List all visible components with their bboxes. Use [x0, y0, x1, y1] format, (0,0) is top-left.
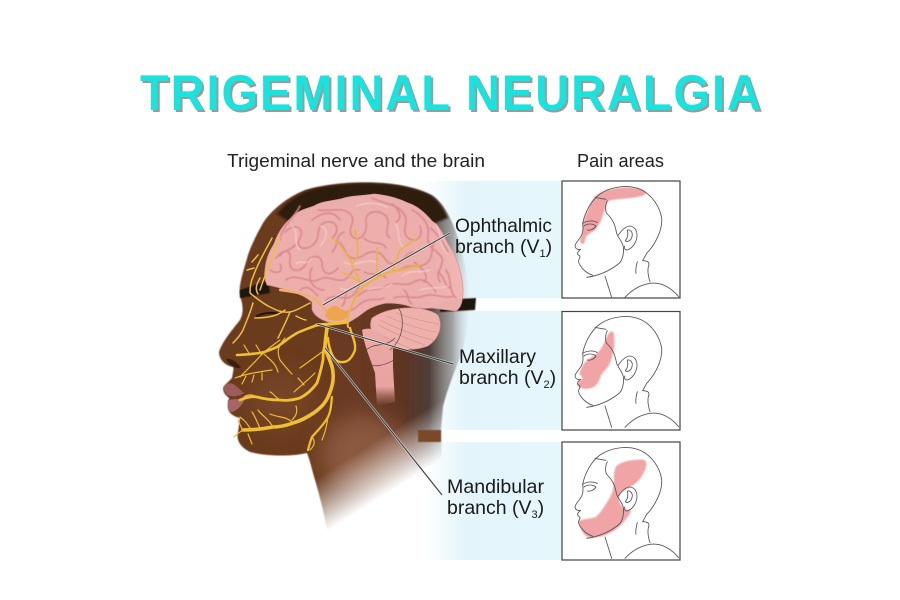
hair	[277, 183, 448, 225]
brain highlights	[292, 203, 448, 290]
cerebellum	[370, 308, 440, 349]
label: mandibular branch: Mandibular	[447, 476, 544, 498]
label: mandibular branch: )	[538, 497, 544, 519]
label: ophthalmic branch: )	[546, 236, 552, 258]
brainstem	[362, 329, 395, 406]
dark bands	[240, 281, 476, 442]
head line drawing	[575, 187, 679, 297]
label: mandibular branch: 3	[532, 509, 538, 521]
forehead branches	[233, 237, 310, 343]
trigeminal nerve branches	[233, 230, 420, 450]
head line drawing	[575, 317, 679, 427]
label: ophthalmic branch: 1	[540, 248, 546, 260]
blue label bands	[425, 181, 562, 560]
label: maxillary branch: 2	[544, 379, 550, 391]
facial features	[223, 313, 280, 412]
vessels at brainstem	[366, 304, 402, 366]
brain	[265, 194, 463, 323]
illustration: head with brain and trigeminal nerve	[219, 182, 476, 536]
brain branches	[333, 230, 420, 327]
title: TRIGEMINAL NEURALGIA	[142, 68, 763, 123]
title: TRIGEMINAL NEURALGIA	[140, 66, 761, 121]
trigeminal ganglion	[325, 306, 348, 321]
panel: maxillary pain area	[562, 312, 680, 430]
head silhouette	[219, 182, 469, 536]
panel: mandibular pain area	[562, 442, 680, 560]
label: mandibular branch: branch (V	[447, 497, 532, 519]
leader lines	[317, 233, 453, 495]
label: ophthalmic branch: branch (V	[455, 236, 540, 258]
label: ophthalmic branch: Ophthalmic	[455, 215, 552, 237]
pain zone V2	[578, 332, 614, 389]
pain zone V3	[579, 460, 646, 538]
heading: pain areas: Pain areas	[577, 150, 664, 171]
head line drawing	[575, 448, 679, 558]
panel: ophthalmic pain area	[562, 181, 680, 298]
brain folds	[270, 198, 456, 314]
fine face branches	[234, 338, 328, 450]
pain zone V1	[580, 187, 646, 244]
main trunk	[237, 322, 355, 450]
label: maxillary branch: Maxillary	[459, 346, 536, 368]
heading: nerve and brain: Trigeminal nerve and the brain	[227, 150, 485, 171]
label: maxillary branch: branch (V	[459, 367, 544, 389]
label: maxillary branch: )	[550, 367, 556, 389]
pale nerve over frontal lobe	[280, 290, 327, 312]
